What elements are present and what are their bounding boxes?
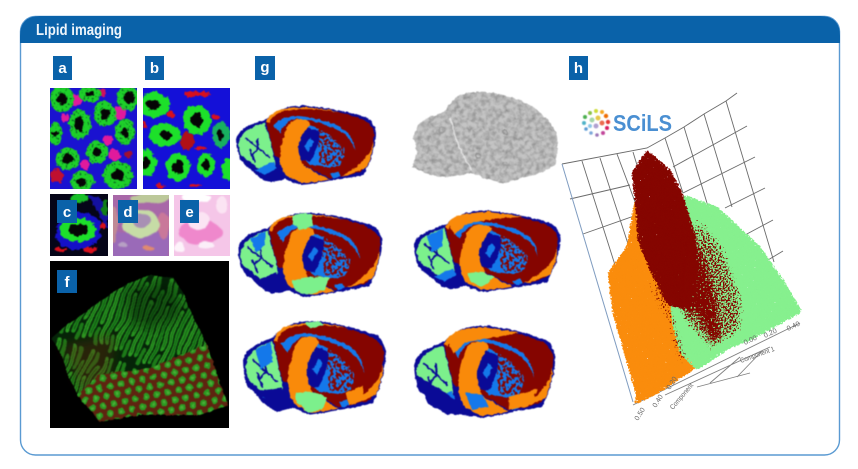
dark red speckled cluster <box>676 240 724 348</box>
image a: fluorescence tissue <box>47 86 140 191</box>
label d <box>118 200 138 223</box>
point clusters <box>608 150 802 405</box>
label g <box>255 56 275 80</box>
label e: e <box>185 204 194 221</box>
image b: fluorescence tissue <box>138 88 234 189</box>
panel g: brain maps <box>236 92 560 418</box>
logo wordmark: SCiLS <box>613 110 672 136</box>
logo dot cluster <box>582 109 610 137</box>
scattered dark red points on orange <box>650 280 686 364</box>
scattered dark red points on green <box>692 220 744 351</box>
axis tick labels <box>634 321 801 422</box>
label h <box>569 56 588 80</box>
axis tick labels: Component <box>669 382 695 411</box>
brain map row 3 left <box>243 321 386 415</box>
label c: c <box>63 204 71 221</box>
heading bar <box>20 16 840 43</box>
axis tick labels: 0.40 <box>652 394 665 409</box>
orange cluster <box>608 202 696 404</box>
label g: g <box>260 59 270 76</box>
image e: stained tissue <box>174 192 230 256</box>
label e <box>180 200 199 223</box>
image f: large tissue section <box>50 261 229 428</box>
logo: SCiLS <box>582 109 672 137</box>
axis tick labels: 0.50 <box>634 407 647 422</box>
label f <box>57 270 77 293</box>
axis tick labels: 0.40 <box>786 321 801 333</box>
label b: b <box>150 60 159 77</box>
brain map row 2 right <box>414 211 560 292</box>
axis tick labels: Component 1 <box>739 346 776 365</box>
title: Lipid imaging <box>36 22 122 39</box>
scattered green points on red <box>679 310 714 350</box>
brain map row 3 right <box>414 326 555 418</box>
axis tick labels: 0.20 <box>666 376 679 391</box>
image c: fluorescence close-up <box>50 193 108 256</box>
label d: d <box>123 204 133 221</box>
label b <box>145 56 164 80</box>
axis tick labels: 0.00 <box>743 335 758 347</box>
gray tissue section <box>412 92 557 183</box>
label c <box>57 200 77 223</box>
axis tick labels: 0.20 <box>763 328 778 340</box>
label f: f <box>64 274 70 291</box>
label a <box>53 56 72 80</box>
brain map row 2 left <box>238 213 382 297</box>
scatter grid <box>562 93 800 405</box>
dark red solid cluster <box>632 150 698 310</box>
green cluster <box>668 195 802 370</box>
panel h: 3D scatter plot <box>562 93 802 422</box>
image d: overlay tissue <box>110 192 170 258</box>
brain map row 1 left <box>236 106 376 185</box>
label h: h <box>574 60 583 77</box>
label a: a <box>58 60 67 77</box>
